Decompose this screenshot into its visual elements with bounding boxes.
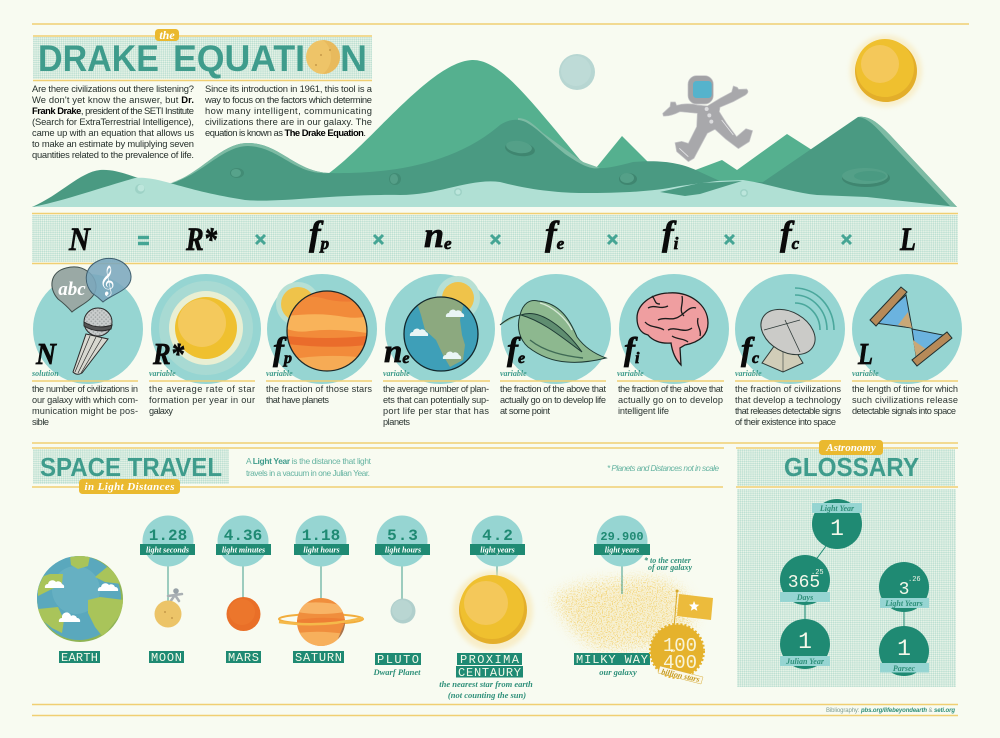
description: R*: formation per year in our (149, 395, 255, 405)
distance: moon: light seconds (146, 546, 189, 554)
description: fi (618, 384, 723, 416)
equation symbols: R* (185, 222, 217, 258)
heading: space travel: SPACE TRAVEL (40, 452, 222, 482)
description: fp: that have planets (266, 395, 329, 405)
icon: brain (637, 293, 708, 365)
description: ne: ets that can potentially sup- (383, 395, 489, 405)
symbol ne: e (402, 350, 409, 367)
glossary: 365.25 days: .25 (811, 569, 824, 577)
equation symbols: f (309, 214, 321, 253)
glossary: 3.26 light years: .26 (908, 576, 921, 584)
glossary: 1 light year (812, 499, 862, 549)
title: DRAKE (38, 38, 159, 79)
intro text column 1 (32, 83, 194, 160)
description: N: munication might be pos- (32, 406, 138, 416)
bibliography: Bibliography: pbs.org/lifebeyondearth & seti.org (826, 708, 955, 714)
intro text column 1: Frank Drake, president of the SETI Institute (32, 105, 194, 116)
description: ne: planets (383, 417, 410, 427)
equation symbols: i (674, 234, 679, 253)
symbol fp: f (273, 332, 284, 368)
distance: proxima centaury (470, 516, 525, 576)
label: proxima centaury: the nearest star from earth (439, 679, 533, 689)
equation symbols: f (545, 214, 557, 253)
label: proxima centaury: CENTAURY (458, 666, 521, 680)
description: L (852, 384, 958, 416)
description: fi: the fraction of the above that (618, 384, 723, 394)
label: saturn: SATURN (295, 651, 342, 665)
intro text column 2: Since its introduction in 1961, this tool is a (205, 83, 373, 94)
description: fc: the fraction of civilizations (735, 384, 841, 394)
description: fi: intelligent life (618, 406, 669, 416)
description: R* (149, 384, 255, 416)
panel: fi (617, 274, 729, 384)
icon: sun (850, 35, 922, 107)
icon: earth (404, 297, 478, 371)
intro text column 1: came up with an equation that allows us (32, 127, 194, 138)
label: pluto: PLUTO (377, 653, 419, 667)
symbol L: L (857, 336, 873, 371)
description: N: our galaxy with which com- (32, 395, 138, 405)
symbol R*: R* (152, 336, 184, 371)
description: ne (383, 384, 489, 427)
intro text column 1: (Search for ExtraTerrestrial Intelligence), (32, 116, 194, 127)
icon: speech bubble music: 𝄞 (99, 265, 115, 297)
description: fi: actually go on to develop (618, 395, 723, 405)
description: ne: port life per star that has (383, 406, 489, 416)
badge: 100 to 400 billion stars (650, 590, 713, 684)
illustration: moonscape mountains (32, 60, 957, 207)
intro text column 2: civilizations there are in our galaxy. The (205, 116, 372, 127)
description: fp: the fraction of those stars (266, 384, 372, 394)
description: fe: at some point (500, 406, 550, 416)
description: fe (500, 384, 606, 416)
panel: N: solution (31, 369, 59, 378)
panel: fe (500, 274, 611, 384)
distance: saturn (294, 516, 349, 598)
title: N (340, 38, 367, 79)
glossary: 3.26 light years (879, 562, 929, 612)
planet: earth (37, 556, 123, 642)
note: light year definition: travels in a vacuum in one Julian Year. (246, 468, 370, 478)
distance: pluto: 5.3 (387, 527, 419, 545)
distance: mars: light minutes (222, 546, 265, 554)
glossary: 1 light year: Light Year (819, 504, 855, 513)
symbol N: N (35, 336, 57, 371)
planet: saturn (279, 598, 363, 646)
icon: hourglass (870, 287, 952, 366)
panel: N (31, 258, 143, 384)
icon: distant moon (559, 54, 595, 90)
icon: speech bubble abc: abc (58, 279, 86, 300)
panel: fc: variable (735, 369, 762, 378)
panel: fp: variable (266, 369, 293, 378)
title (33, 28, 372, 80)
label: proxima centaury: PROXIMA (460, 653, 520, 667)
equation symbols: n (424, 215, 444, 255)
title: the (159, 28, 175, 42)
note: light year definition: A Light Year is the distance that light (246, 456, 372, 466)
label: milky way: our galaxy (599, 667, 637, 677)
glossary: 1 julian year: 1 (798, 629, 812, 655)
description: ne: the average number of plan- (383, 384, 489, 394)
panel: L (852, 274, 962, 384)
description: N: the number of civilizations in (32, 384, 138, 394)
planet: moon with astronaut (154, 588, 182, 628)
intro text column 2: equation is known as The Drake Equation. (205, 127, 366, 138)
panel: fc (735, 274, 845, 384)
equation symbols: p (319, 234, 329, 253)
distance: milky way: 29.900 (600, 530, 644, 544)
icon: astronaut (663, 76, 753, 162)
symbol fi: f (624, 332, 635, 368)
glossary: 365.25 days: Days (796, 593, 813, 602)
intro text column 2: how many intelligent, communicating (205, 105, 372, 116)
equation symbols: c (792, 234, 800, 253)
label: milky way: MILKY WAY (576, 653, 648, 667)
description: fc: that releases detectable signs (735, 406, 841, 416)
icon: microphone (73, 308, 112, 374)
distance: moon (140, 516, 195, 602)
equation symbols: f (780, 214, 792, 253)
distance: pluto (375, 516, 430, 600)
distance: proxima centaury: 4.2 (482, 527, 514, 545)
label: moon: MOON (151, 651, 182, 665)
label: earth: EARTH (61, 651, 98, 665)
planet: pluto (390, 598, 416, 624)
panel: fp (266, 274, 377, 384)
glossary: 1 parsec: 1 (897, 636, 911, 662)
panel: L: variable (852, 369, 879, 378)
note: scale: * Planets and Distances not in scale (607, 464, 719, 473)
description: R*: the average rate of star (149, 384, 255, 394)
star: proxima centaury (453, 571, 533, 651)
badge: 100 to 400 billion stars: 100 (663, 635, 697, 657)
description: N: sible (32, 417, 49, 427)
galaxy: milky way dust (552, 578, 693, 650)
description: R*: galaxy (149, 406, 173, 416)
glossary: 1 parsec (879, 626, 929, 676)
symbol fc: c (752, 350, 759, 367)
heading: space travel: in Light Distances (84, 481, 174, 493)
symbol fe: e (518, 350, 525, 367)
description: fc (735, 384, 841, 427)
glossary: 3.26 light years: 3 (899, 580, 909, 600)
panel: ne (383, 274, 495, 384)
intro text column 1: quantities related to the prevalence of life. (32, 149, 194, 160)
label: proxima centaury (439, 653, 533, 700)
planet: mars (226, 597, 260, 631)
equation symbols: N (68, 222, 91, 258)
glossary: 1 parsec: Parsec (893, 664, 916, 673)
intro text column 2: way to focus on the factors which determine (204, 94, 372, 105)
badge: 100 to 400 billion stars: billion stars (661, 667, 700, 684)
glossary: 1 julian year: Julian Year (785, 657, 825, 666)
distance: mars (216, 516, 271, 598)
description: L: such civilizations release (852, 395, 958, 405)
equation symbols: L (899, 222, 916, 258)
title: EQUATI (173, 38, 305, 79)
distance: saturn: 1.18 (302, 527, 340, 545)
distance: milky way: of our galaxy (648, 563, 692, 572)
panel: ne: variable (383, 369, 410, 378)
intro text column 2 (204, 83, 373, 138)
description: fe: actually go on to develop life (500, 395, 606, 405)
distance: moon: 1.28 (149, 527, 187, 545)
equation symbols: f (662, 214, 674, 253)
panel: R* (149, 274, 261, 384)
distance: proxima centaury: light years (480, 546, 515, 554)
panel: fi: variable (617, 369, 644, 378)
badge: 100 to 400 billion stars: to (671, 649, 675, 654)
panel: R*: variable (149, 369, 176, 378)
symbol fi: i (635, 350, 640, 367)
label: pluto (372, 653, 421, 677)
distance: mars: 4.36 (224, 527, 262, 545)
description: fc: of their existence into space (735, 417, 836, 427)
heading: glossary: Astronomy (825, 442, 876, 454)
description: fe: the fraction of the above that (500, 384, 606, 394)
icon: satellite dish (753, 288, 834, 372)
intro text column 1: to make an estimate by muliplying seven (32, 138, 194, 149)
badge: 100 to 400 billion stars: 400 (663, 652, 697, 674)
glossary: 3.26 light years: Light Years (884, 599, 923, 608)
equation symbols: e (557, 234, 565, 253)
label: mars: MARS (228, 651, 259, 665)
equation operators (138, 235, 851, 244)
distance: saturn: light hours (303, 546, 340, 554)
glossary: 365.25 days: 365 (788, 573, 820, 593)
description: fc: that develop a technology (735, 395, 841, 405)
glossary: 1 light year: 1 (830, 516, 844, 542)
distance: milky way (594, 516, 692, 594)
heading: glossary (736, 440, 958, 487)
description dividers (32, 380, 958, 382)
description: fp (266, 384, 372, 405)
intro text column 1: We don't yet know the answer, but Dr. (32, 94, 194, 105)
symbol fc: f (741, 332, 752, 368)
equation band (32, 214, 958, 264)
panel: fe: variable (500, 369, 527, 378)
description: L: detectable signals into space (852, 406, 956, 416)
equation symbols: e (444, 234, 452, 253)
icon: leaf (500, 301, 606, 362)
distance: milky way: * to the center (644, 556, 692, 565)
heading: glossary: GLOSSARY (784, 452, 919, 482)
note: light year definition (246, 456, 372, 478)
symbol ne: n (384, 334, 402, 370)
panel: glossary (737, 489, 956, 687)
description: L: the length of time for which (852, 384, 958, 394)
description: N (32, 384, 138, 427)
icon: orange planet (287, 291, 367, 372)
label: pluto: Dwarf Planet (372, 667, 421, 677)
glossary: 365.25 days (780, 555, 830, 605)
equation symbols (68, 214, 916, 258)
glossary: 1 julian year (780, 619, 830, 669)
intro text column 1: Are there civilizations out there listening? (32, 83, 194, 94)
label: proxima centaury: (not counting the sun) (448, 690, 526, 700)
distance: milky way: light years (605, 546, 639, 554)
distance: pluto: light hours (385, 546, 421, 554)
symbol fe: f (507, 332, 518, 368)
label: milky way (574, 653, 650, 677)
heading: space travel (32, 448, 724, 494)
symbol fp: p (282, 350, 292, 367)
